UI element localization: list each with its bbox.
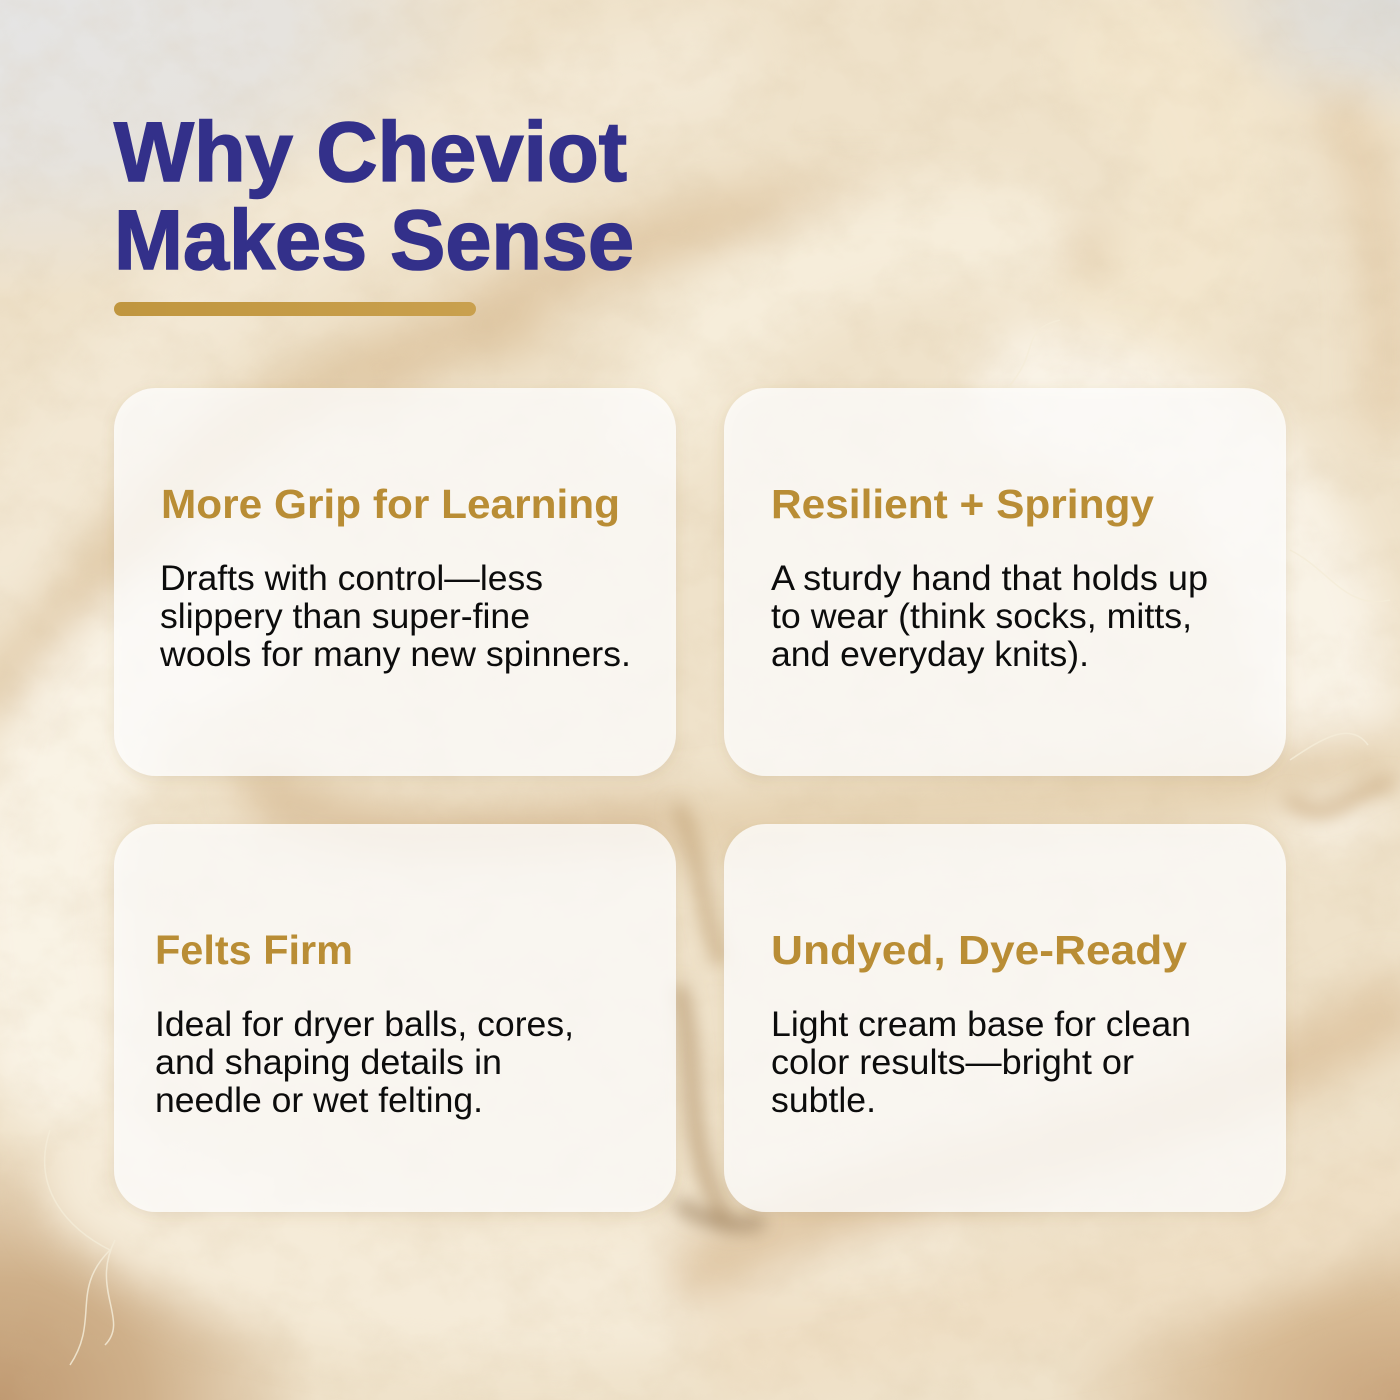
- panel: Resilient + Springy: [724, 388, 1286, 776]
- text: Felts Firm description: needle or wet felting.: [155, 1081, 483, 1120]
- title: Why Cheviot: [114, 105, 627, 199]
- text: Undyed description: color results—bright or: [771, 1043, 1134, 1082]
- text: Felts Firm description: [155, 1005, 574, 1120]
- text: Resilient description: and everyday knits).: [771, 635, 1089, 674]
- heading: Felts Firm: Felts Firm: [155, 927, 353, 973]
- title: Makes Sense: [114, 193, 634, 287]
- heading: Resilient + Springy: Resilient + Springy: [771, 481, 1154, 527]
- text: Resilient description: [771, 559, 1208, 674]
- title: [114, 105, 634, 287]
- text: Resilient description: to wear (think socks, mitts,: [771, 597, 1192, 636]
- heading: Undyed, Dye-Ready: Undyed, Dye-Ready: [771, 927, 1187, 973]
- panel: Felts Firm: [114, 824, 676, 1212]
- text: Resilient description: A sturdy hand that holds up: [771, 559, 1208, 598]
- text: Undyed description: [771, 1005, 1191, 1120]
- heading: More Grip for Learning: More Grip for Learning: [161, 481, 620, 527]
- panel: More Grip for Learning: [114, 388, 676, 776]
- text: More Grip description: Drafts with control—less: [160, 559, 543, 598]
- text: Felts Firm description: and shaping details in: [155, 1043, 502, 1082]
- title underline: [114, 302, 476, 316]
- text: Undyed description: Light cream base for clean: [771, 1005, 1191, 1044]
- panel: Undyed, Dye-Ready: [724, 824, 1286, 1212]
- text: Undyed description: subtle.: [771, 1081, 876, 1120]
- text: More Grip description: slippery than super-fine: [160, 597, 530, 636]
- text: Felts Firm description: Ideal for dryer balls, cores,: [155, 1005, 574, 1044]
- text: More Grip description: wools for many new spinners.: [159, 635, 631, 674]
- text: More Grip description: [159, 559, 631, 674]
